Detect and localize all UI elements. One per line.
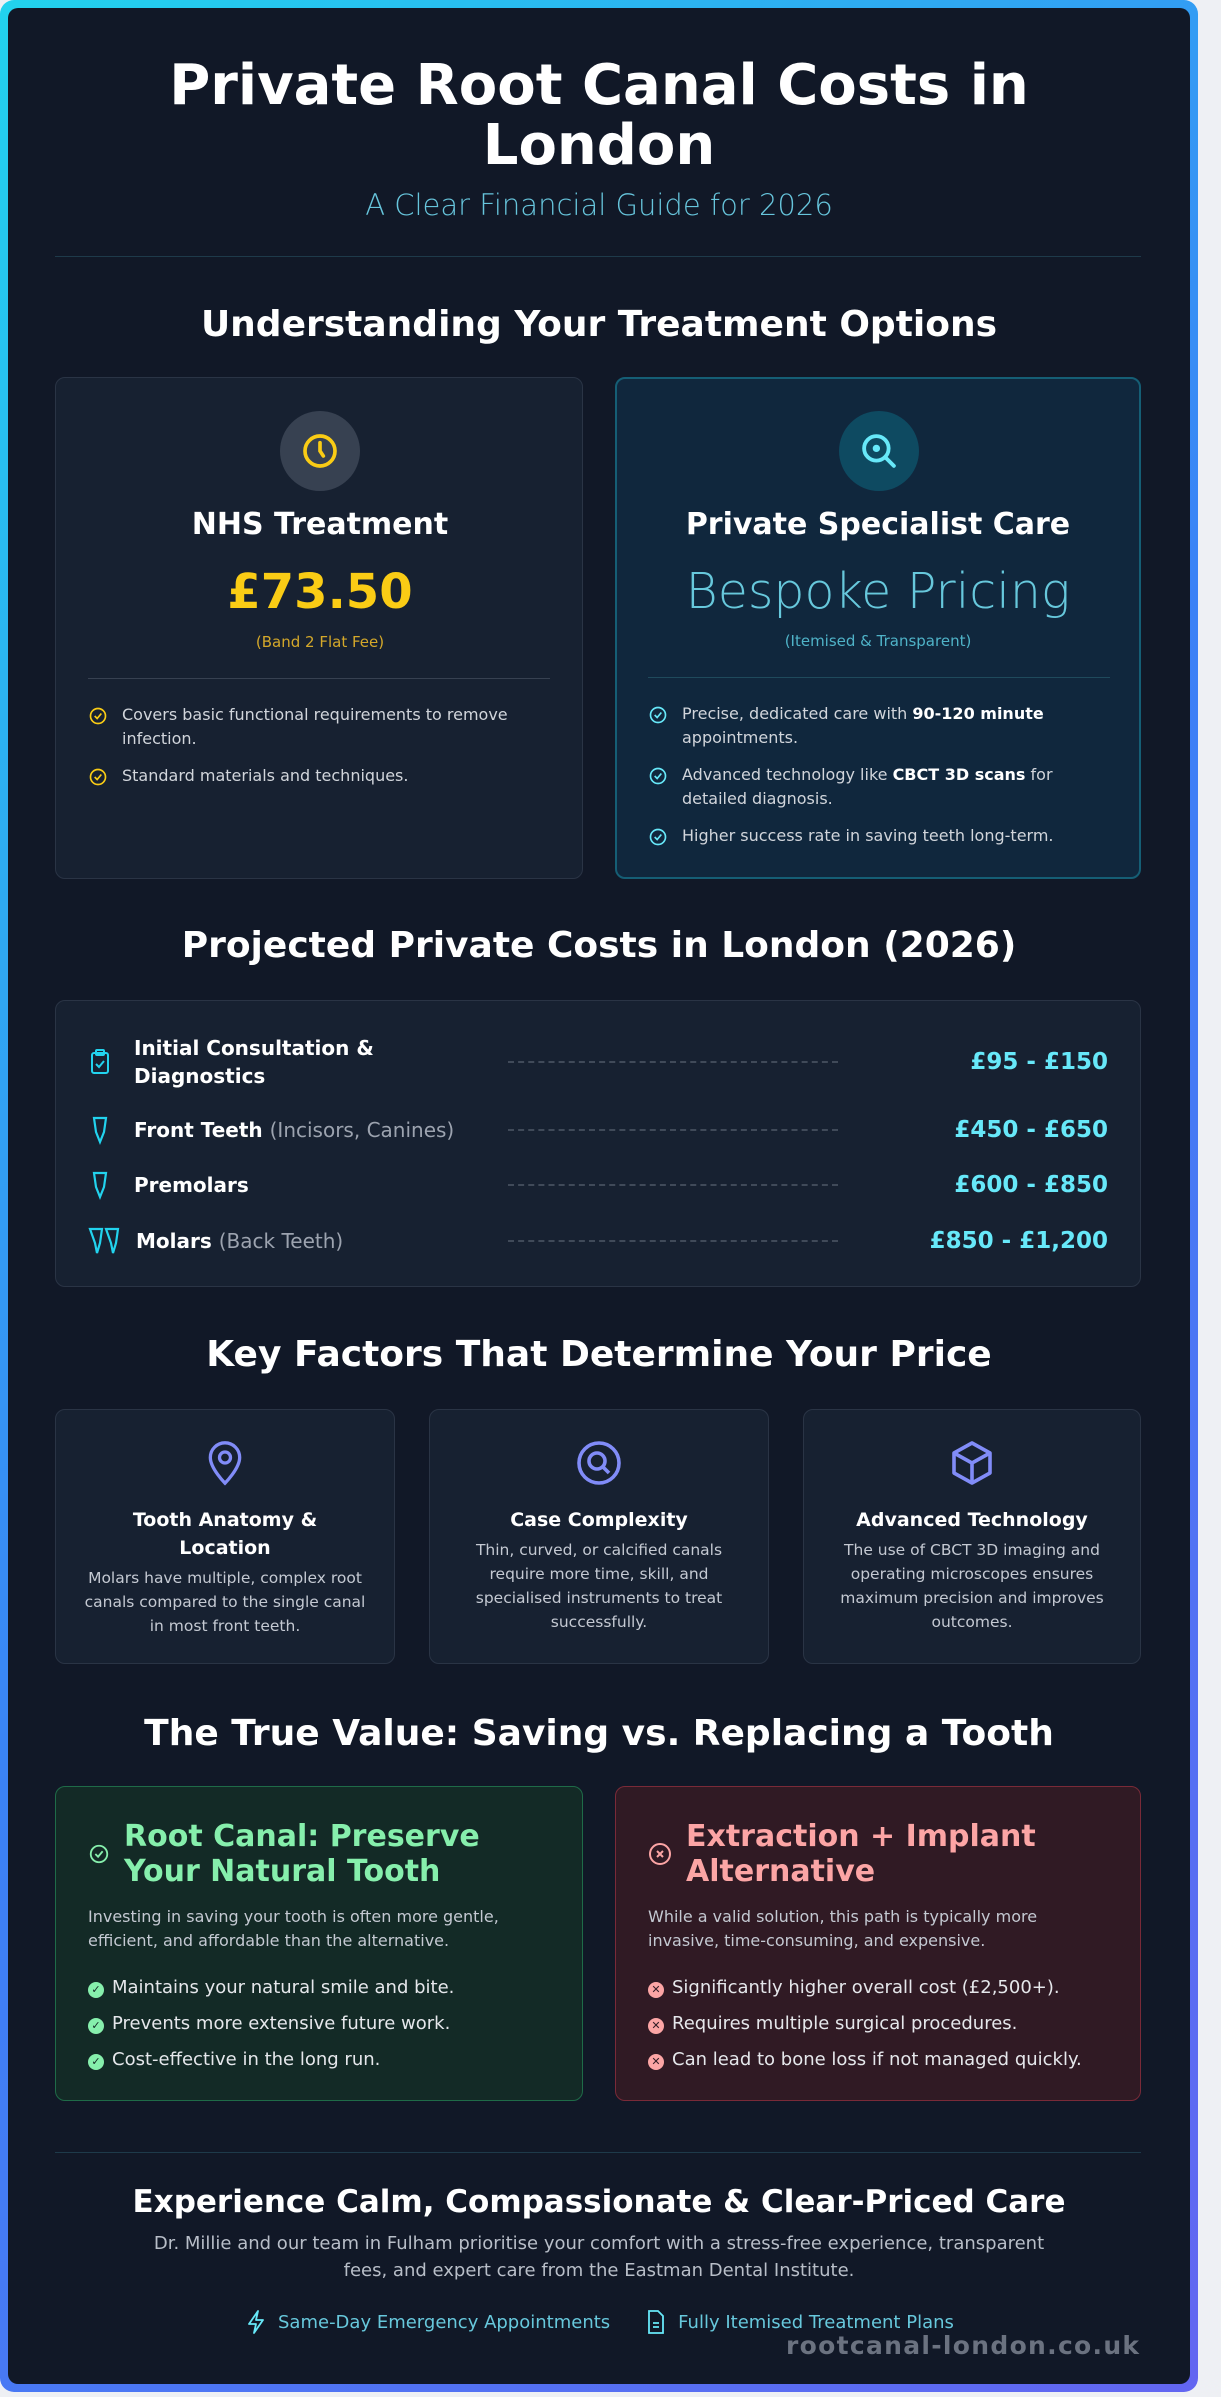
bullets: ✕ [651, 1983, 661, 1996]
heading with icon: Alternative [686, 1854, 875, 1889]
title: London [483, 113, 715, 178]
intro text: Investing in saving your tooth is often more gentle, efficient, and affordable than the alternative. [88, 1907, 499, 1950]
heading: key factors: Key Factors That Determine Your Price [206, 1334, 992, 1375]
bullets: Requires multiple surgical procedures. [672, 2013, 1017, 2034]
heading: true value: The True Value: Saving vs. Replacing a Tooth [144, 1713, 1054, 1754]
panel: root canal [55, 1786, 583, 2101]
panel: complexity: Case Complexity [510, 1509, 688, 1531]
panel: NHS [55, 377, 583, 879]
row: molars: Molars (Back Teeth) [136, 1229, 343, 1253]
icon: clock [280, 411, 360, 491]
heading with icon: Root Canal: Preserve [124, 1819, 480, 1854]
panel: technology: The use of CBCT 3D imaging and operating microscopes ensures maximum precision and improves outcomes. [840, 1541, 1104, 1631]
heading with icon: Your Natural Tooth [124, 1854, 440, 1889]
title [169, 53, 1029, 178]
price: Bespoke Pricing [686, 563, 1070, 620]
row: premolars [92, 1172, 1108, 1200]
row: premolars: Premolars [134, 1173, 249, 1197]
row: front teeth: £450 - £650 [954, 1117, 1108, 1143]
title: Private Root Canal Costs in [169, 53, 1029, 118]
bullets: ✓ [91, 2019, 101, 2032]
bullets: Advanced technology like CBCT 3D scans for detailed diagnosis. [682, 765, 1053, 808]
icon: magnifier [839, 411, 919, 491]
icon: cube [952, 1441, 992, 1485]
bullets: ✕ [651, 2019, 661, 2032]
price note: (Itemised & Transparent) [785, 632, 971, 650]
intro text: While a valid solution, this path is typically more invasive, time-consuming, and expensive. [648, 1907, 1037, 1950]
bullets: Prevents more extensive future work. [112, 2013, 450, 2034]
card title: NHS Treatment [192, 507, 448, 542]
panel: anatomy: Location [179, 1537, 271, 1559]
icon: search circle [577, 1441, 621, 1485]
row: consultation: Initial Consultation & [134, 1036, 374, 1060]
bullets: Covers basic functional requirements to remove infection. [122, 705, 508, 748]
row: front teeth [92, 1116, 1108, 1145]
bullets: Can lead to bone loss if not managed quickly. [672, 2049, 1082, 2070]
row: consultation: £95 - £150 [970, 1049, 1108, 1075]
bullets: Standard materials and techniques. [122, 766, 408, 785]
bullets: Precise, dedicated care with 90-120 minute appointments. [682, 704, 1044, 747]
row: molars [88, 1228, 1108, 1254]
bullets: ✕ [651, 2055, 661, 2068]
price: £73.50 [227, 564, 413, 620]
panel: extraction [615, 1786, 1141, 2101]
bullets: Higher success rate in saving teeth long-term. [682, 826, 1054, 845]
footer features [248, 2310, 954, 2334]
row: molars: £850 - £1,200 [930, 1228, 1108, 1254]
bullets: ✓ [91, 2055, 101, 2068]
footer text: Dr. Millie and our team in Fulham prioritise your comfort with a stress-free experience, transparent fees, and expert care from the Eastman Dental Institute. [154, 2233, 1044, 2281]
heading: treatment options: Understanding Your Treatment Options [201, 304, 997, 345]
heading with icon [90, 1819, 480, 1889]
bullets [650, 704, 1054, 846]
panel: complexity: Thin, curved, or calcified canals require more time, skill, and specialised instruments to treat successfully. [476, 1541, 722, 1631]
panel: anatomy [55, 1409, 395, 1664]
heading with icon [649, 1819, 1036, 1889]
heading with icon: Extraction + Implant [686, 1819, 1036, 1854]
panel: anatomy: Tooth Anatomy & [133, 1509, 317, 1531]
bullets: Cost-effective in the long run. [112, 2049, 380, 2070]
row: premolars: £600 - £850 [954, 1172, 1108, 1198]
panel: cost table [55, 1000, 1141, 1287]
footer features: Fully Itemised Treatment Plans [678, 2312, 954, 2332]
panel: private [615, 377, 1141, 879]
icon: pin [208, 1441, 242, 1486]
panel: technology: Advanced Technology [856, 1509, 1088, 1531]
price note: (Band 2 Flat Fee) [256, 633, 384, 651]
bullets: Maintains your natural smile and bite. [112, 1977, 454, 1998]
bullets [88, 1977, 454, 2070]
bullets [648, 1977, 1082, 2070]
footer heading: Experience Calm, Compassionate & Clear-Priced Care [133, 2184, 1065, 2220]
panel: technology [803, 1409, 1141, 1664]
footer features: Same-Day Emergency Appointments [278, 2312, 610, 2332]
panel: complexity [429, 1409, 769, 1664]
row: front teeth: Front Teeth (Incisors, Canines) [134, 1118, 454, 1142]
row: consultation: Diagnostics [134, 1064, 265, 1088]
bullets: Significantly higher overall cost (£2,500+). [672, 1977, 1060, 1998]
panel: anatomy: Molars have multiple, complex root canals compared to the single canal in most front teeth. [85, 1569, 365, 1635]
card title: Private Specialist Care [686, 507, 1070, 542]
bullets: ✓ [91, 1983, 101, 1996]
subtitle: A Clear Financial Guide for 2026 [365, 188, 833, 222]
row: consultation [91, 1036, 1108, 1088]
bullets [90, 705, 508, 786]
heading: projected costs: Projected Private Costs in London (2026) [182, 925, 1016, 966]
watermark: rootcanal-london.co.uk [786, 2331, 1140, 2360]
